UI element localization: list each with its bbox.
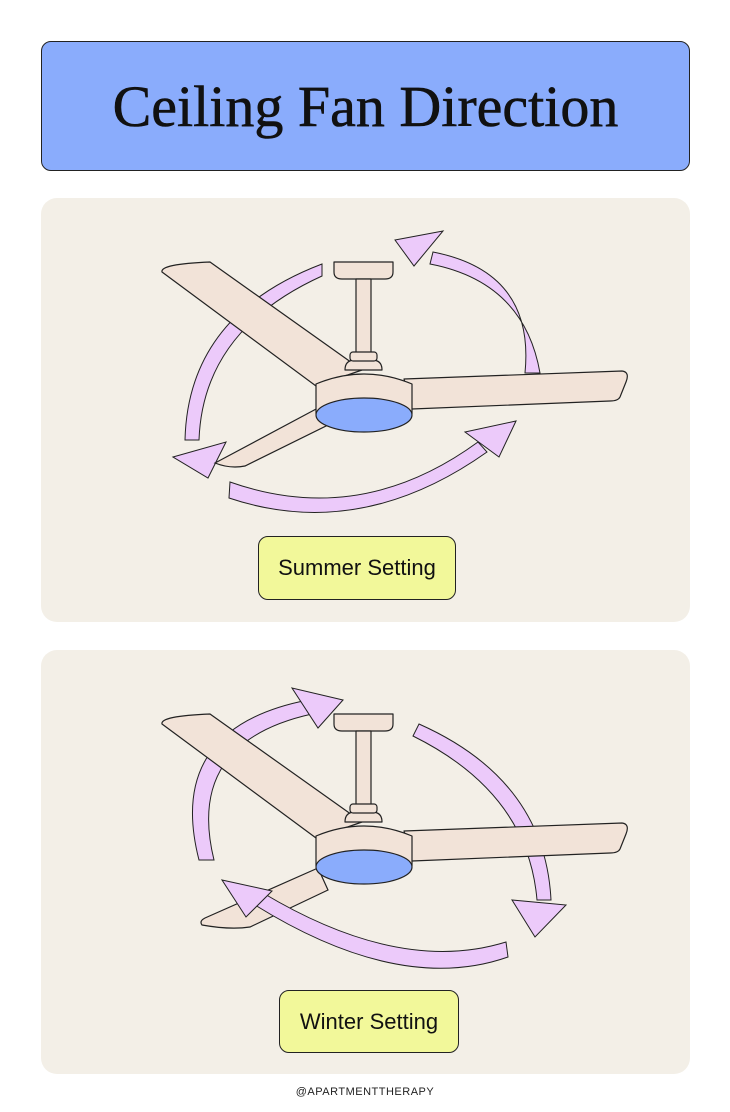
arrow: right up — [395, 231, 540, 373]
arrow: top-left up — [192, 688, 343, 860]
fan: winter — [162, 688, 627, 968]
label: winter — [279, 990, 459, 1053]
arrow: left down — [173, 264, 322, 478]
label: summer: Summer Setting — [278, 555, 436, 580]
arrow: bottom right — [229, 421, 516, 512]
title — [41, 41, 690, 171]
fan: summer — [162, 231, 627, 512]
arrow: right down — [413, 724, 566, 937]
blade: lower left — [215, 408, 330, 467]
title: Ceiling Fan Direction — [113, 74, 618, 138]
arrow: bottom left — [222, 880, 508, 968]
label: winter: Winter Setting — [300, 1008, 438, 1034]
footer: @APARTMENTTHERAPY — [296, 1086, 434, 1098]
blade: lower left — [201, 868, 328, 928]
label: summer — [258, 536, 456, 600]
panel: winter — [41, 650, 690, 1074]
panel: summer — [41, 198, 690, 622]
